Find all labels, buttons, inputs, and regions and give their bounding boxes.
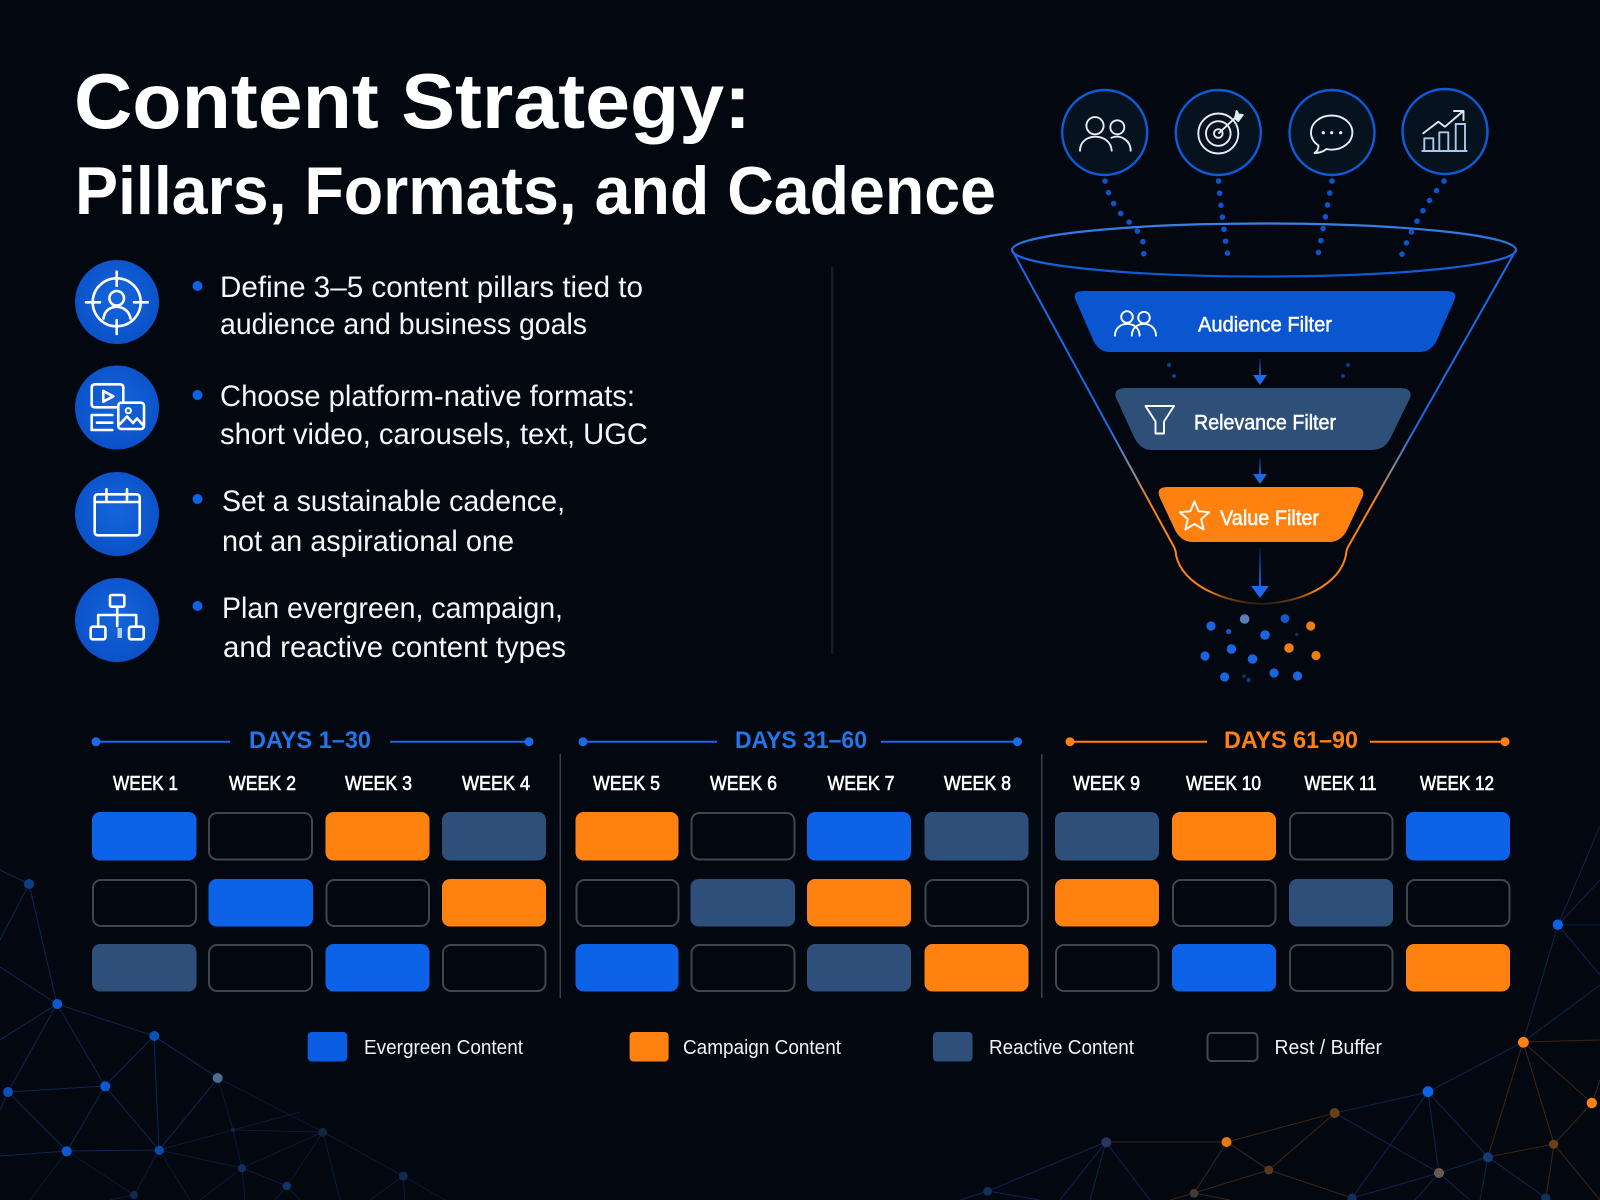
icon: media formats — [75, 366, 159, 450]
item 3: cadence — [75, 472, 565, 558]
legend: reactive — [933, 1032, 1134, 1062]
item 4: content types: Plan evergreen, campaign, — [222, 592, 563, 625]
item 3: cadence: not an aspirational one — [222, 525, 514, 558]
funnel body — [1012, 250, 1516, 604]
network decoration: bottom right — [960, 826, 1600, 1200]
schedule row 2 — [93, 879, 1510, 926]
item 4: content types — [75, 578, 566, 664]
panel: pillars list — [75, 260, 648, 664]
week labels — [113, 773, 1494, 795]
icon: growth chart circle — [1402, 89, 1488, 174]
legend: reactive: Reactive Content — [989, 1036, 1134, 1059]
week labels: WEEK 7 — [828, 773, 894, 795]
heading: days 61-90 — [1066, 727, 1510, 754]
week labels: WEEK 10 — [1186, 773, 1261, 795]
icon: calendar — [75, 472, 159, 556]
icon: target circle — [1176, 90, 1261, 175]
title — [74, 57, 996, 229]
legend: evergreen: Evergreen Content — [364, 1036, 523, 1059]
dotted connectors — [1105, 181, 1444, 257]
output particles — [1200, 614, 1321, 682]
week labels: WEEK 3 — [345, 773, 412, 795]
relevance filter: Relevance Filter — [1194, 412, 1336, 434]
heading: days 31-60 — [578, 727, 1022, 754]
week labels: WEEK 6 — [710, 773, 777, 795]
legend: evergreen — [308, 1032, 523, 1062]
item 1: content pillars: Define 3–5 content pillars tied to — [220, 271, 643, 304]
title: Content Strategy: — [74, 57, 751, 145]
network decoration: bottom left — [0, 870, 445, 1200]
title: Pillars, Formats, and Cadence — [75, 153, 996, 229]
funnel rim — [1012, 224, 1516, 276]
column divider — [831, 267, 834, 654]
arrow: relevance to value — [1253, 458, 1267, 484]
panel: funnel — [1012, 89, 1516, 682]
legend: rest: Rest / Buffer — [1274, 1036, 1382, 1059]
schedule row 3 — [92, 944, 1510, 992]
item 2: formats: short video, carousels, text, UGC — [220, 418, 648, 451]
value filter: Value Filter — [1220, 507, 1319, 530]
legend: campaign: Campaign Content — [683, 1036, 841, 1059]
small dots — [1167, 363, 1350, 378]
audience filter — [1075, 291, 1455, 352]
week labels: WEEK 12 — [1420, 773, 1494, 795]
icon: hierarchy — [75, 578, 159, 662]
schedule row 1 — [92, 812, 1510, 860]
heading: days 31-60: DAYS 31–60 — [735, 727, 867, 754]
week labels: WEEK 4 — [462, 773, 530, 795]
arrow: funnel output — [1251, 548, 1269, 598]
item 3: cadence: Set a sustainable cadence, — [222, 485, 565, 518]
heading: days 61-90: DAYS 61–90 — [1224, 727, 1358, 754]
heading: days 1-30 — [92, 727, 534, 754]
week labels: WEEK 2 — [229, 773, 296, 795]
week labels: WEEK 9 — [1073, 773, 1140, 795]
icon: audience circle — [1062, 90, 1147, 175]
icon: comment circle — [1290, 90, 1374, 175]
arrow: audience to relevance — [1253, 359, 1267, 385]
audience filter: Audience Filter — [1198, 314, 1332, 336]
heading: days 1-30: DAYS 1–30 — [249, 727, 371, 754]
legend: campaign — [630, 1032, 841, 1062]
value filter — [1159, 487, 1363, 542]
week labels: WEEK 8 — [944, 773, 1011, 795]
item 1: content pillars: audience and business goals — [220, 308, 587, 341]
week labels: WEEK 5 — [593, 773, 660, 795]
legend — [308, 1032, 1382, 1062]
week labels: WEEK 11 — [1304, 773, 1376, 795]
item 1: content pillars — [75, 260, 643, 344]
item 2: formats — [75, 366, 648, 451]
item 4: content types: and reactive content types — [223, 631, 566, 664]
week labels: WEEK 1 — [113, 773, 178, 795]
phase dividers — [560, 754, 1042, 998]
legend: rest — [1208, 1033, 1382, 1061]
relevance filter — [1115, 388, 1411, 450]
icon: audience target — [75, 260, 159, 344]
item 2: formats: Choose platform-native formats: — [220, 380, 635, 413]
panel: 90-day calendar — [92, 727, 1510, 998]
